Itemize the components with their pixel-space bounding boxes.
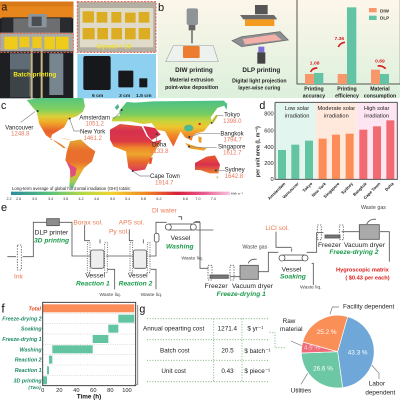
bar chart: printing comparison: Printing xyxy=(304,87,324,93)
category labels: Reaction 2 xyxy=(15,358,42,364)
cost table text: 20.5 xyxy=(221,347,234,354)
band titles: High solar xyxy=(364,106,390,112)
category labels: Total xyxy=(28,306,42,312)
band titles xyxy=(285,106,390,119)
band titles: Moderate solar xyxy=(317,106,355,112)
flow left labels: Waste liq. xyxy=(99,292,121,298)
flow right labels: Soaking xyxy=(280,274,306,281)
flow right part xyxy=(193,219,389,285)
colour scale legend: 5.8 xyxy=(141,197,146,201)
colour scale legend: 6.2 xyxy=(156,197,162,201)
panel b background xyxy=(158,0,400,98)
category labels: Freeze-drying 2 xyxy=(2,316,42,322)
band titles: irradiation xyxy=(364,113,389,119)
panel c: world irradiation map xyxy=(1,98,246,201)
flow left labels xyxy=(14,208,203,298)
city labels: Tokyo xyxy=(301,181,314,193)
flow left labels: Ink xyxy=(14,274,24,281)
x tick labels: 0 xyxy=(41,388,44,394)
cost table text: Batch cost xyxy=(160,347,190,354)
y tick labels xyxy=(264,112,274,183)
pie percentages: 4.9 % xyxy=(304,344,320,351)
y tick labels: 600 xyxy=(264,128,274,134)
pie callouts: Utilities xyxy=(291,387,311,394)
colour scale legend: Long-term average of global horizontal irradiation (GHI) totals: xyxy=(12,186,131,191)
city labels: 1794.7 xyxy=(223,138,242,144)
icon: DIW printer xyxy=(166,8,218,62)
solar irradiation bands xyxy=(275,102,397,179)
gyroid samples photo xyxy=(77,2,156,52)
axes xyxy=(275,102,397,179)
pie callouts xyxy=(280,304,396,396)
city markers and leader lines xyxy=(21,109,225,176)
americas landmass xyxy=(27,98,95,188)
y tick labels: 200 xyxy=(264,161,274,167)
panel f: time gantt chart xyxy=(1,301,136,401)
panel label g: g xyxy=(139,303,145,315)
city labels: Amsterdam xyxy=(267,181,287,201)
panel label b: b xyxy=(158,2,164,14)
category labels xyxy=(2,306,42,390)
bar chart: printing comparison: DLP xyxy=(380,16,389,21)
colour scale legend: 6.6 xyxy=(183,197,188,201)
x tick labels: 60 xyxy=(90,388,96,394)
colour scale legend: 3.4 xyxy=(48,197,53,201)
city labels: New York xyxy=(310,181,328,198)
map annotations xyxy=(1,100,246,201)
x tick labels: 80 xyxy=(107,388,113,394)
DLP caption: layer-wise curing xyxy=(238,86,280,92)
bar chart: printing comparison: Printing xyxy=(337,87,357,93)
flow right labels xyxy=(205,205,390,298)
band titles: irradiation xyxy=(324,113,349,119)
cost table text: $ yr⁻¹ xyxy=(247,326,263,333)
flow left labels: Waste liq. xyxy=(181,255,203,261)
category labels: 3D printing xyxy=(14,378,42,384)
DIW caption: DIW printing xyxy=(175,67,213,74)
pie callouts: Labor xyxy=(369,380,385,387)
flow left labels: Washing xyxy=(166,244,194,251)
city labels: Bangkok xyxy=(220,131,244,137)
flow left labels: 3D printing xyxy=(34,238,69,245)
colour scale legend: kWh m⁻² xyxy=(231,192,243,196)
city labels: Doha xyxy=(384,181,395,192)
flow left labels: Py sol. xyxy=(109,228,129,235)
y tick labels: 400 xyxy=(264,145,274,151)
city labels: Sydney xyxy=(225,167,245,173)
city labels: Amsterdam xyxy=(79,115,110,121)
bar chart: printing comparison: 0.69 xyxy=(375,58,385,64)
city labels: 1612.7 xyxy=(223,151,242,157)
cost table grid xyxy=(147,319,285,382)
flow right labels: Vacuum dryer xyxy=(344,242,386,249)
bar chart: printing comparison: consumption xyxy=(364,93,396,99)
flow right labels: ( $0.43 per each) xyxy=(345,275,390,281)
colour scale legend: 2.2 xyxy=(6,197,12,201)
pie chart xyxy=(301,315,374,388)
city labels: 1642.8 xyxy=(225,174,244,180)
DIW caption: Material extrusion xyxy=(170,78,214,84)
flow left labels: Vessel xyxy=(128,272,148,279)
bars xyxy=(278,120,394,179)
city labels: 1248.8 xyxy=(11,131,30,137)
DLP caption: Digital light projection xyxy=(232,79,287,85)
city labels: 1461.2 xyxy=(84,136,102,142)
city labels: Sydney xyxy=(340,181,355,195)
scaled cubes photo: 6 cm xyxy=(92,93,104,99)
pie percentages: 25.2 % xyxy=(317,329,337,336)
x tick labels: 20 xyxy=(56,388,62,394)
cost table text: Annual opearting cost xyxy=(143,326,204,333)
colour scale legend: 5.0 xyxy=(110,197,115,201)
cost table text: $ piece⁻¹ xyxy=(244,368,270,375)
bar chart: printing comparison xyxy=(297,0,400,99)
flow left labels: DLP printer xyxy=(35,229,69,236)
icon: DLP printer xyxy=(232,5,288,64)
scaled cubes photo: 3 cm xyxy=(119,93,131,99)
city labels xyxy=(267,181,395,201)
left bracket xyxy=(134,305,138,384)
flow right labels: LiCl sol. xyxy=(265,225,289,232)
category labels: Freeze-drying 1 xyxy=(2,337,42,343)
category labels: (Two) xyxy=(28,385,41,390)
DLP caption: DLP printing xyxy=(242,67,280,74)
flow right labels: Freeze-drying 2 xyxy=(329,249,379,256)
bar chart: printing comparison: accuracy xyxy=(303,93,325,99)
gyroid samples photo: Gyroid × 10 xyxy=(97,44,132,51)
x tick labels: 40 xyxy=(73,388,79,394)
bar chart: printing comparison: Material xyxy=(370,87,390,93)
colour scale legend: 3.0 xyxy=(32,197,37,201)
printer photo: Batch printing xyxy=(13,71,56,78)
panel label f: f xyxy=(1,301,5,315)
pie callouts: dependent xyxy=(365,389,396,396)
flow right labels: Hygroscopic matrix xyxy=(336,267,390,273)
flow right labels: Vessel xyxy=(282,266,302,273)
bar chart: printing comparison: DIW xyxy=(380,8,390,13)
flow left labels: Vessel xyxy=(171,235,191,242)
city labels: New York xyxy=(80,130,105,136)
flow left labels: Borax sol. xyxy=(73,219,103,226)
flow right labels: Waste gas xyxy=(361,205,386,211)
city labels: Vancouver xyxy=(281,181,300,200)
city labels: 1398.0 xyxy=(223,119,242,125)
pie callouts: Facility dependent xyxy=(343,304,395,311)
panel label a: a xyxy=(1,2,7,14)
flow right labels: Freezer xyxy=(205,283,228,290)
city labels: 1051.2 xyxy=(86,122,104,128)
colour scale legend: 4.6 xyxy=(94,197,99,201)
city labels: Singapore xyxy=(218,144,246,150)
city labels: Bangkok xyxy=(352,181,368,197)
old world landmass xyxy=(110,101,227,179)
bar chart: printing comparison: 1.08 xyxy=(310,60,320,66)
cost table text: 1271.4 xyxy=(218,326,237,333)
printer photo xyxy=(0,2,73,98)
pie percentages xyxy=(304,329,368,372)
city labels: Vancouver xyxy=(5,125,33,131)
y tick labels: 800 xyxy=(264,112,274,118)
category labels: Washing xyxy=(20,347,42,353)
flow right labels: Vacuum dryer xyxy=(232,283,274,290)
band titles: Low solar xyxy=(285,106,309,112)
category labels: Reaction 1 xyxy=(15,368,42,374)
flow right labels: Waste gas xyxy=(242,245,268,251)
x axis title: Time (h) xyxy=(77,394,101,401)
x tick labels: 100 xyxy=(122,388,132,394)
axes frame xyxy=(43,302,136,386)
city labels: 2133.8 xyxy=(150,149,169,155)
category labels: Soaking xyxy=(21,327,42,333)
city labels: Cape Town xyxy=(362,181,382,200)
flow left labels: Waste liq. xyxy=(141,292,162,298)
pie callouts: Raw xyxy=(283,318,296,325)
city labels: Cape Town xyxy=(150,174,180,180)
flow left labels: Vessel xyxy=(85,272,105,279)
colour scale legend: 5.4 xyxy=(125,197,130,201)
colour scale legend: 7.4 xyxy=(211,197,216,201)
panel label e: e xyxy=(1,202,7,214)
y tick labels: 0 xyxy=(271,177,274,183)
colour scale legend: 4.2 xyxy=(78,197,84,201)
flow left labels: DI water xyxy=(152,208,178,215)
panel label d: d xyxy=(259,100,265,112)
panel a: batch printing photos xyxy=(0,2,156,99)
cost table text: 0.43 xyxy=(221,368,234,375)
DIW caption: point-wise deposition xyxy=(165,85,218,91)
city labels: Doha xyxy=(152,143,167,149)
city labels xyxy=(5,113,246,186)
bar chart: printing comparison: efficiency xyxy=(335,93,359,99)
colour scale legend: 2.6 xyxy=(16,197,21,201)
pie callouts: material xyxy=(280,326,303,333)
flow right labels: Freezer xyxy=(318,242,342,249)
city labels: 1914.7 xyxy=(155,180,174,186)
cost table text: Unit cost xyxy=(161,368,186,375)
panel g: cost table and pie chart xyxy=(134,303,396,396)
band titles: irradiation xyxy=(285,113,309,119)
flow left part xyxy=(7,217,213,289)
panel b: printing comparison xyxy=(158,0,400,99)
x tick labels xyxy=(41,388,132,394)
scaled cubes photo: 1.5 cm xyxy=(136,93,152,99)
city labels: Tokyo xyxy=(224,113,240,119)
flow right labels: Waste liq. xyxy=(300,285,322,291)
pie percentages: 43.3 % xyxy=(348,349,368,356)
flow right labels: Freeze-drying 1 xyxy=(217,291,266,298)
flow left labels: Reaction 1 xyxy=(76,281,110,288)
DIW caption xyxy=(165,67,218,91)
DLP caption xyxy=(232,67,287,92)
bar chart: printing comparison: 7.36 xyxy=(334,36,344,42)
cost table text: $ batch⁻¹ xyxy=(244,348,271,355)
bars xyxy=(43,304,134,384)
flow left labels: APS sol. xyxy=(119,219,144,226)
flow left labels: Reaction 2 xyxy=(119,281,153,288)
pie percentages: 26.6 % xyxy=(313,365,333,372)
scaled cubes photo xyxy=(77,54,156,99)
colour scale legend: 7.0 xyxy=(195,197,201,201)
gridlines xyxy=(43,313,136,375)
city labels: Singapore xyxy=(322,181,341,199)
panel d: bar chart per unit area xyxy=(255,100,397,201)
colour scale legend xyxy=(6,186,243,201)
cost table text xyxy=(143,326,271,375)
colour scale legend: 3.8 xyxy=(63,197,68,201)
panel label c: c xyxy=(1,100,7,112)
panel e: process flow diagram xyxy=(1,202,390,298)
y axis title: per unit area (L m⁻²) xyxy=(255,126,261,177)
